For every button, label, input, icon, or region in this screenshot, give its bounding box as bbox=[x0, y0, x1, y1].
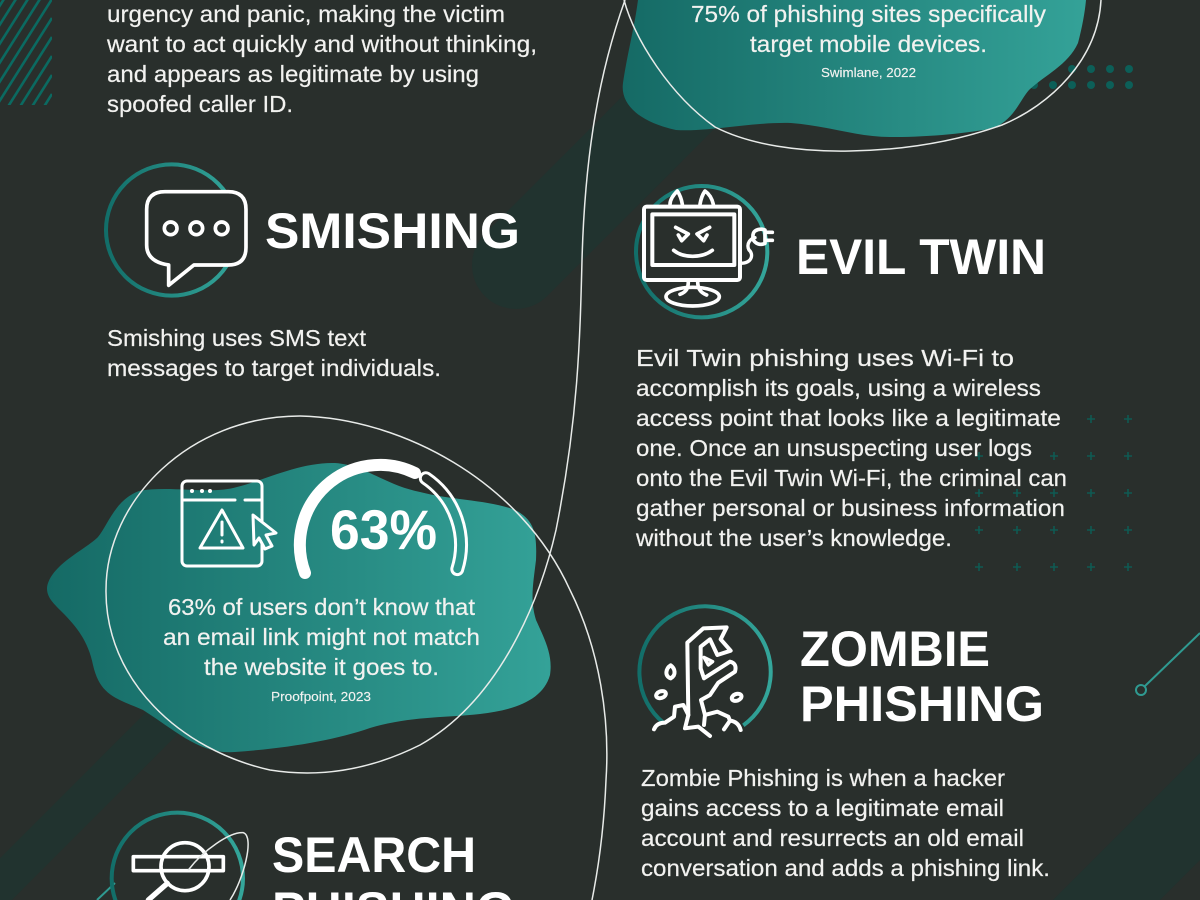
text block: vishing description bbox=[106, 1, 537, 117]
text block: zombie phishing description: account and resurrects an old email bbox=[641, 825, 1024, 851]
accent line with circle end bbox=[1136, 633, 1200, 695]
section: evil twin bbox=[635, 186, 1067, 551]
text block: evil twin description: Evil Twin phishing uses Wi-Fi to bbox=[636, 345, 1014, 371]
blob: mobile statistic bbox=[623, 0, 1086, 137]
text block: evil twin description: access point that looks like a legitimate bbox=[636, 405, 1061, 431]
text block: evil twin description: onto the Evil Twin Wi-Fi, the criminal can bbox=[636, 465, 1067, 491]
text block: zombie phishing description: conversation and adds a phishing link. bbox=[641, 855, 1050, 881]
text block: zombie phishing description: Zombie Phishing is when a hacker bbox=[641, 765, 1005, 791]
heading: evil twin: EVIL TWIN bbox=[796, 229, 1046, 285]
blob: email link statistic bbox=[47, 463, 551, 752]
heading: search phishing: SEARCH bbox=[272, 827, 476, 883]
heading: smishing: SMISHING bbox=[265, 203, 520, 259]
text block: 63 percent statistic: 63% of users don’t know that bbox=[168, 594, 475, 620]
text block: 63 percent statistic bbox=[163, 594, 480, 680]
diagonal stripes pattern bbox=[0, 0, 52, 105]
icon: devil monitor bbox=[636, 186, 772, 317]
heading: zombie phishing bbox=[800, 621, 1044, 732]
text block: vishing description: spoofed caller ID. bbox=[107, 91, 293, 117]
plus grid, right side bbox=[975, 415, 1132, 571]
text block: 63 percent statistic: the website it goes to. bbox=[204, 654, 439, 680]
accent line, lower left bbox=[97, 883, 115, 900]
icon: zombie hand bbox=[639, 606, 771, 736]
statistic: 75 percent mobile: Swimlane, 2022 bbox=[821, 65, 916, 80]
text block: 63 percent statistic: an email link might not match bbox=[163, 624, 480, 650]
text block: zombie phishing description bbox=[641, 765, 1050, 881]
text block: smishing description: messages to target individuals. bbox=[107, 355, 441, 381]
text block: evil twin description: accomplish its goals, using a wireless bbox=[636, 375, 1041, 401]
text block: evil twin description: one. Once an unsuspecting user logs bbox=[636, 435, 1032, 461]
text block: vishing description: want to act quickly and without thinking, bbox=[106, 31, 537, 57]
icon: browser warning bbox=[182, 481, 276, 566]
icon: magnifying glass bbox=[112, 813, 248, 900]
heading: zombie phishing: PHISHING bbox=[800, 676, 1044, 732]
thin flowing line connecting the circles bbox=[106, 0, 625, 900]
gauge: 63 percent arc bbox=[300, 465, 466, 575]
heading: zombie phishing: ZOMBIE bbox=[800, 621, 990, 677]
gauge: 63 percent arc: 63% bbox=[330, 498, 437, 561]
dot grid, upper right bbox=[1030, 65, 1133, 89]
text block: evil twin description bbox=[635, 345, 1067, 551]
statistic: 75 percent mobile: target mobile devices. bbox=[750, 31, 987, 57]
text block: smishing description bbox=[107, 325, 441, 381]
text block: zombie phishing description: gains access to a legitimate email bbox=[641, 795, 1004, 821]
source: proofpoint: Proofpoint, 2023 bbox=[271, 689, 371, 704]
text block: vishing description: and appears as legitimate by using bbox=[107, 61, 479, 87]
statistic: 75 percent mobile: 75% of phishing sites specifically bbox=[691, 1, 1046, 27]
text block: vishing description: urgency and panic, making the victim bbox=[107, 1, 505, 27]
thin circle around mobile statistic bbox=[624, 0, 1101, 151]
heading: search phishing bbox=[272, 827, 515, 900]
icon: speech bubble bbox=[106, 164, 246, 296]
statistic panel: 63 percent bbox=[163, 465, 480, 704]
statistic: 75 percent mobile bbox=[691, 1, 1046, 80]
text block: evil twin description: gather personal or business information bbox=[636, 495, 1065, 521]
section: search phishing bbox=[112, 813, 515, 900]
section: smishing bbox=[106, 164, 520, 381]
section: zombie phishing bbox=[639, 606, 1050, 881]
text block: evil twin description: without the user’s knowledge. bbox=[635, 525, 952, 551]
text block: smishing description: Smishing uses SMS text bbox=[107, 325, 366, 351]
